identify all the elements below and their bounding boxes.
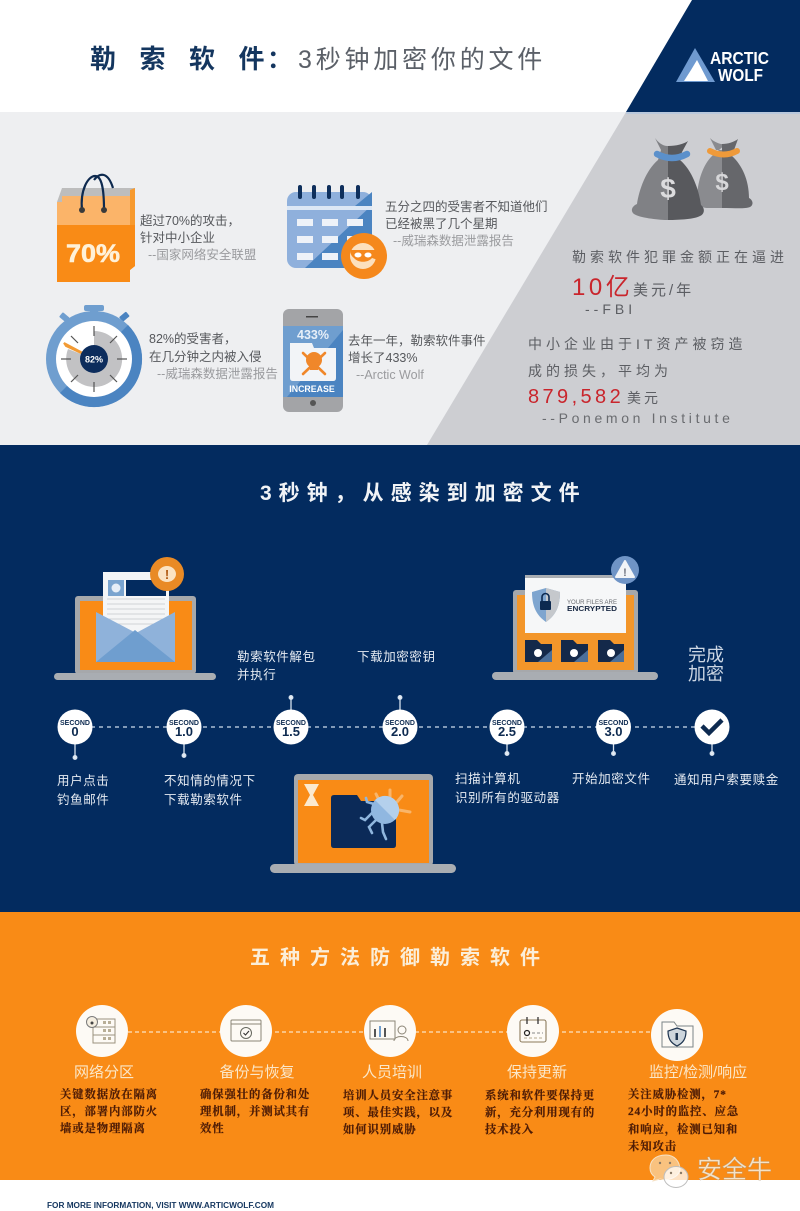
practice 3: staff training: 培训人员安全注意事 (343, 1090, 453, 1102)
marker: second 1.5: 1.5 (282, 724, 300, 739)
text: four fifths of victims: 五分之四的受害者不知道他们 (385, 200, 548, 214)
title: 勒索软件： (90, 44, 316, 74)
practice 3: staff training (343, 1064, 453, 1136)
panel: timeline (0, 445, 800, 912)
icon: money bags (632, 138, 753, 220)
text: completed encryption: 加密 (688, 664, 724, 684)
marker: second 1.5 (274, 710, 308, 744)
step text: unpack and execute: 并执行 (237, 668, 276, 682)
illustration: encrypted laptop: ! (623, 567, 627, 579)
marker: second 2.5 (490, 710, 524, 744)
marker: second 3.0: 3.0 (604, 724, 623, 739)
title: 3秒钟加密你的文件 (298, 46, 546, 74)
illustration: email laptop: ! (165, 567, 169, 582)
marker: second 1.0 (166, 710, 202, 744)
text: 433% increase: --Arctic Wolf (356, 368, 424, 382)
practice 3: staff training: 如何识别威胁 (343, 1122, 417, 1136)
heading: three seconds: 3秒钟，从感染到加密文件 (260, 481, 587, 505)
marker: second 3.0 (596, 710, 631, 744)
step text: scan computer: 扫描计算机 (455, 772, 521, 786)
connector: dashes (128, 1031, 650, 1033)
icon: stopwatch 82% (46, 305, 142, 407)
practice 2: backup and recovery: 效性 (200, 1121, 224, 1135)
text: 433% increase: 去年一年，勒索软件事件 (348, 334, 486, 348)
step text: user clicks: 用户点击 (57, 774, 109, 788)
step text: scan computer: 识别所有的驱动器 (455, 790, 560, 805)
stat: one billion per year: 10亿 (572, 274, 633, 301)
illustration: encrypted laptop: YOUR FILES ARE (567, 599, 618, 606)
logo: Arctic Wolf: WOLF (718, 65, 763, 85)
practice 1: network segmentation: 关键数据放在隔离 (60, 1089, 158, 1101)
marker: second 0: SECOND (60, 720, 90, 727)
icon: money bags: $ (715, 169, 729, 196)
practice 1: network segmentation (60, 1064, 158, 1135)
text: 70% attacks: 针对中小企业 (140, 230, 215, 245)
stat: 879,582: 879,582 (528, 386, 624, 408)
practice 1: network segmentation: 网络分区 (74, 1064, 134, 1081)
practice 4: stay updated (485, 1064, 595, 1136)
marker: second 2.0 (382, 710, 418, 744)
source: Ponemon: --Ponemon Institute (542, 410, 734, 426)
watermark (650, 1155, 772, 1188)
marker: second 0 (58, 710, 92, 744)
marker: second 1.0: SECOND (169, 720, 199, 727)
practice 5: monitor detect respond: 监控/检测/响应 (649, 1063, 747, 1081)
footer link: FOR MORE INFORMATION, VISIT WWW.ARTICWOLF.COM (47, 1201, 274, 1210)
illustration: email laptop (54, 557, 216, 680)
practice 5: monitor detect respond (628, 1063, 747, 1153)
icon: money bags: $ (660, 173, 676, 204)
heading: five methods: 五种方法防御勒索软件 (250, 945, 550, 969)
illustration: encrypted laptop: ENCRYPTED (567, 606, 617, 613)
practice 4: stay updated: 保持更新 (507, 1064, 567, 1081)
logo: Arctic Wolf (676, 48, 769, 85)
text: four fifths of victims: --威瑞森数据泄露报告 (393, 233, 514, 248)
step text: unknowingly downloads: 不知情的情况下 (164, 774, 256, 788)
step text: unknowingly downloads: 下载勒索软件 (164, 793, 243, 807)
text: 433% increase: 增长了433% (348, 350, 417, 365)
text: four fifths of victims: 已经被黑了几个星期 (385, 217, 498, 231)
icon: phone 433%: INCREASE (289, 384, 335, 394)
logo: Arctic Wolf: ARCTIC (710, 48, 769, 68)
step text: unpack and execute: 勒索软件解包 (237, 650, 316, 664)
illustration: encrypted laptop (492, 556, 658, 680)
marker: second 2.0: SECOND (385, 720, 415, 727)
practice 3: staff training: 人员培训 (362, 1064, 422, 1081)
text: 82% of victims: 82%的受害者， (149, 332, 237, 346)
step text: notify user: 通知用户索要赎金 (674, 772, 779, 787)
timeline (58, 696, 730, 759)
panel: statistics (0, 112, 800, 445)
watermark: 安全牛 (697, 1156, 772, 1184)
step text: download key: 下载加密密钥 (357, 649, 436, 664)
marker: second 2.5: 2.5 (498, 724, 516, 739)
practice 2: backup and recovery: 理机制，并测试其有 (200, 1104, 310, 1118)
practice 2: backup and recovery: 备份与恢复 (219, 1063, 295, 1081)
step text: user clicks: 钓鱼邮件 (57, 793, 109, 807)
practice 3: staff training: 项、最佳实践，以及 (343, 1105, 453, 1119)
practice 2: backup and recovery: 确保强壮的备份和处 (200, 1089, 310, 1101)
practice 4: stay updated: 技术投入 (485, 1122, 534, 1136)
marker: second 1.0: 1.0 (175, 724, 193, 739)
marker: second 3.0: SECOND (599, 720, 628, 727)
text: crime amount: 勒索软件犯罪金额正在逼进 (572, 249, 788, 265)
marker: complete check (694, 710, 730, 744)
text: SMB losses: 中小企业由于IT资产被窃造 (528, 336, 746, 352)
practice 4: stay updated: 新，充分利用现有的 (485, 1105, 595, 1119)
icon: shopping bag 70% (57, 175, 135, 282)
text: 82% of victims: --威瑞森数据泄露报告 (157, 366, 278, 381)
marker: second 0: 0 (71, 724, 79, 739)
practice 2: backup and recovery (200, 1063, 310, 1135)
icon: stopwatch 82%: 82% (85, 354, 103, 364)
practice 5: monitor detect respond: 和响应，检测已知和 (628, 1122, 738, 1136)
header panel (0, 0, 800, 112)
icon: backup (220, 1005, 272, 1057)
icon: keep updated (507, 1005, 559, 1057)
practice 4: stay updated: 系统和软件要保持更 (485, 1090, 595, 1102)
stat: one billion per year: 美元/年 (633, 282, 694, 299)
icon: network segmentation (76, 1005, 128, 1057)
illustration: malware laptop (270, 774, 456, 873)
icon: phone 433%: 433% (297, 328, 329, 342)
icon: monitoring (651, 1009, 703, 1061)
marker: second 2.0: 2.0 (391, 724, 409, 739)
icon: phone 433% (283, 309, 343, 412)
text: completed encryption: 完成 (688, 645, 724, 665)
source: FBI: --FBI (585, 301, 636, 317)
stat: 879,582: 美元 (627, 390, 661, 406)
practice 5: monitor detect respond: 未知攻击 (628, 1139, 677, 1153)
marker: second 2.5: SECOND (492, 720, 522, 727)
text: 70% attacks: --国家网络安全联盟 (148, 247, 256, 262)
icon: shopping bag 70%: 70% (66, 240, 120, 268)
marker: second 1.5: SECOND (276, 720, 306, 727)
icon: calendar (287, 185, 387, 279)
text: SMB losses: 成的损失，平均为 (528, 363, 672, 379)
practice 1: network segmentation: 区，部署内部防火 (60, 1104, 158, 1118)
practice 1: network segmentation: 墙或是物理隔离 (60, 1121, 146, 1135)
text: 82% of victims: 在几分钟之内被入侵 (149, 349, 262, 364)
practice 5: monitor detect respond: 关注威胁检测，7* (628, 1089, 727, 1101)
panel: defences (0, 912, 800, 1180)
text: 70% attacks: 超过70%的攻击， (140, 214, 240, 228)
step text: begin encrypting: 开始加密文件 (572, 771, 651, 786)
practice 5: monitor detect respond: 24小时的监控、应急 (628, 1104, 740, 1118)
icon: training (364, 1005, 416, 1057)
